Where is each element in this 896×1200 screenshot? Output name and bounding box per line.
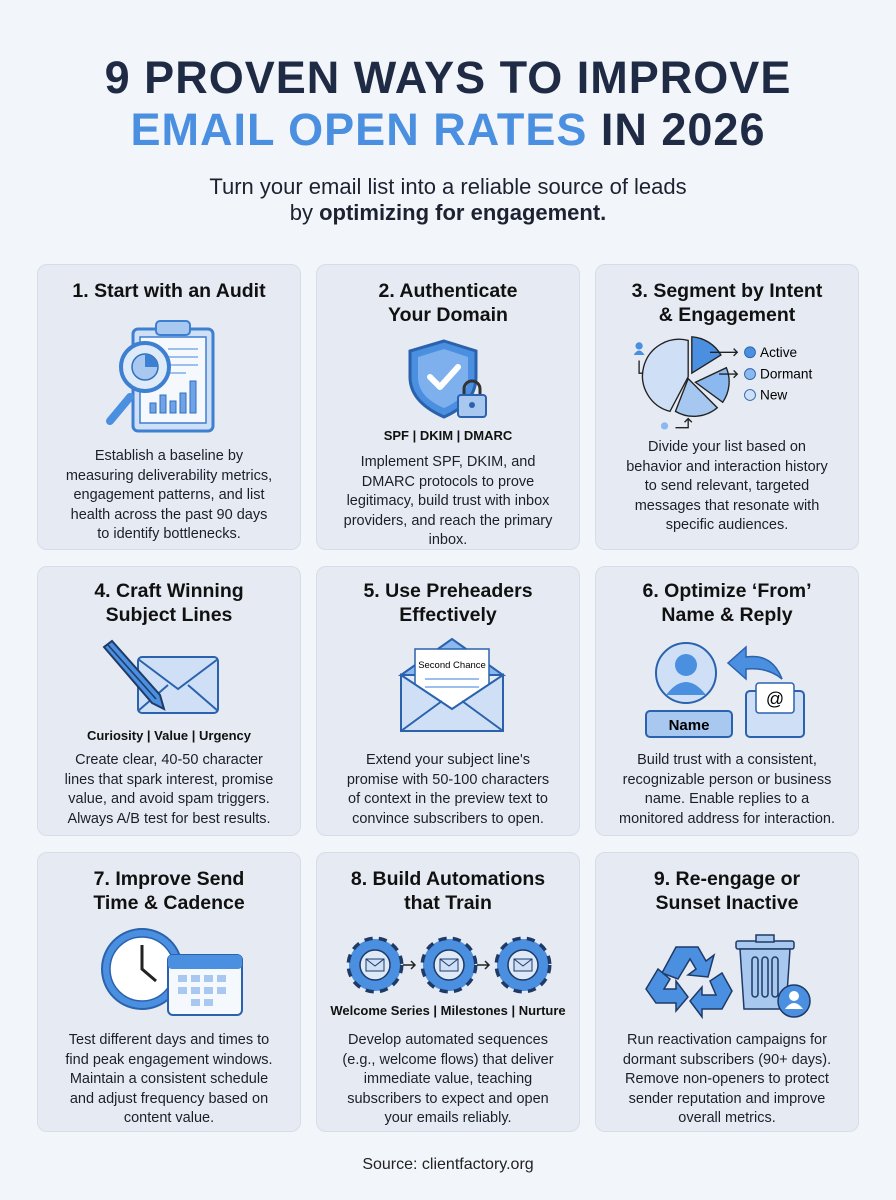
icon: clock calendar: [101, 928, 243, 1016]
text 2: providers, and reach the primary: [344, 512, 552, 528]
text 5: [347, 752, 549, 826]
text 8: (e.g., welcome flows) that deliver: [342, 1052, 554, 1068]
text 6: recognizable person or business: [623, 772, 831, 788]
text 3: [626, 439, 828, 533]
text 5: convince subscribers to open.: [352, 810, 544, 826]
text 5: promise with 50-100 characters: [347, 772, 549, 788]
text 9: overall metrics.: [678, 1110, 776, 1126]
heading 2: [378, 280, 518, 326]
text 5: Extend your subject line's: [366, 752, 530, 768]
text 2: Implement SPF, DKIM, and: [361, 454, 535, 470]
heading 3: [632, 280, 822, 326]
heading 4: [94, 580, 244, 626]
heading 2: 2. Authenticate: [378, 280, 518, 302]
title: 9 PROVEN WAYS TO IMPROVE: [105, 52, 791, 103]
text 3: messages that resonate with: [635, 498, 819, 514]
label: SPF DKIM DMARC: SPF | DKIM | DMARC: [384, 428, 512, 443]
text 1: engagement patterns, and list: [73, 487, 265, 503]
subtitle: [209, 174, 687, 225]
text 4: value, and avoid spam triggers.: [68, 791, 270, 807]
heading 8: 8. Build Automations: [351, 868, 545, 890]
text 5: of context in the preview text to: [348, 791, 548, 807]
heading 6: [642, 580, 812, 626]
heading 6: 6. Optimize ‘From’: [642, 580, 812, 602]
text 4: [65, 752, 273, 826]
panel: 2 authenticate: [316, 264, 580, 550]
text 7: content value.: [124, 1110, 214, 1126]
text 1: to identify bottlenecks.: [97, 526, 241, 542]
icon: envelope pencil: [102, 640, 219, 714]
heading 7: 7. Improve Send: [94, 868, 244, 890]
heading 4: Subject Lines: [106, 604, 232, 626]
text 7: and adjust frequency based on: [70, 1090, 268, 1106]
label: welcome milestones nurture: Welcome Series | Milestones | Nurture: [330, 1003, 566, 1018]
icon: open envelope: Second Chance: [418, 660, 486, 671]
icon: pie chart segments: [634, 336, 812, 430]
heading 5: Effectively: [399, 604, 497, 626]
icon: recycle trash: [645, 934, 811, 1020]
panel: 4 subject lines: [37, 566, 301, 836]
text 3: to send relevant, targeted: [645, 478, 809, 494]
text 7: [65, 1032, 273, 1126]
text 9: Remove non-openers to protect: [625, 1071, 829, 1087]
text 2: [344, 454, 552, 548]
text 4: Create clear, 40-50 character: [75, 752, 263, 768]
text 1: measuring deliverability metrics,: [66, 468, 272, 484]
text 9: sender reputation and improve: [629, 1090, 825, 1106]
panel: 3 segment: [595, 264, 859, 550]
icon: pie chart segments: New: [760, 388, 787, 403]
text 8: immediate value, teaching: [364, 1071, 532, 1087]
text 3: behavior and interaction history: [626, 458, 828, 474]
panel: 9 re-engage: [595, 852, 859, 1132]
heading 3: & Engagement: [659, 304, 795, 326]
icon: profile reply: Name: [669, 717, 709, 734]
text 7: find peak engagement windows.: [65, 1052, 273, 1068]
text 6: monitored address for interaction.: [619, 810, 835, 826]
heading 4: 4. Craft Winning: [94, 580, 244, 602]
text 7: Maintain a consistent schedule: [70, 1071, 268, 1087]
text 8: subscribers to expect and open: [347, 1090, 549, 1106]
panel: 5 preheaders: [316, 566, 580, 836]
panel: 8 automations: [316, 852, 580, 1132]
heading 7: Time & Cadence: [93, 892, 245, 914]
text 1: [66, 448, 272, 542]
source: Source: clientfactory.org: [362, 1156, 534, 1173]
text 2: DMARC protocols to prove: [362, 474, 534, 490]
icon: profile reply: @: [766, 689, 784, 709]
text 6: Build trust with a consistent,: [637, 752, 817, 768]
text 9: [623, 1032, 831, 1126]
panel: 1 audit: [37, 264, 301, 550]
subtitle: Turn your email list into a reliable source of leads: [209, 174, 687, 199]
title: [105, 52, 791, 155]
text 1: health across the past 90 days: [71, 506, 267, 522]
panel: 7 send time: [37, 852, 301, 1132]
text 4: Always A/B test for best results.: [67, 810, 271, 826]
text 9: dormant subscribers (90+ days).: [623, 1052, 831, 1068]
heading 3: 3. Segment by Intent: [632, 280, 822, 302]
text 9: Run reactivation campaigns for: [627, 1032, 827, 1048]
heading 8: that Train: [404, 892, 492, 914]
icon: pie chart segments: Active: [760, 345, 797, 360]
text 7: Test different days and times to: [69, 1032, 269, 1048]
subtitle: by optimizing for engagement.: [290, 200, 606, 225]
text 2: legitimacy, build trust with inbox: [347, 493, 549, 509]
text 8: Develop automated sequences: [348, 1032, 548, 1048]
text 6: name. Enable replies to a: [645, 791, 809, 807]
icon: open envelope: [398, 638, 506, 732]
heading 5: [363, 580, 533, 626]
icon: pie chart segments: Dormant: [760, 367, 812, 382]
text 3: specific audiences.: [666, 517, 788, 533]
heading 9: 9. Re-engage or: [654, 868, 800, 890]
panel: 6 from name: [595, 566, 859, 836]
heading 9: [654, 868, 800, 914]
text 2: inbox.: [429, 532, 467, 548]
heading 5: 5. Use Preheaders: [363, 580, 533, 602]
icon: gears with envelopes: [346, 936, 552, 994]
icon: profile reply: [645, 642, 805, 738]
text 3: Divide your list based on: [648, 439, 806, 455]
text 8: [342, 1032, 554, 1126]
text 1: Establish a baseline by: [95, 448, 243, 464]
heading 9: Sunset Inactive: [655, 892, 799, 914]
icon: shield lock: [408, 339, 487, 419]
icon: clipboard magnifier: [106, 320, 214, 432]
title: EMAIL OPEN RATES IN 2026: [130, 104, 766, 155]
heading 1: 1. Start with an Audit: [72, 280, 266, 302]
heading 8: [351, 868, 545, 914]
label: curiosity value urgency: Curiosity | Value | Urgency: [87, 728, 251, 743]
text 8: your emails reliably.: [384, 1110, 512, 1126]
heading 2: Your Domain: [388, 304, 508, 326]
heading 6: Name & Reply: [661, 604, 793, 626]
heading 7: [93, 868, 245, 914]
text 4: lines that spark interest, promise: [65, 772, 273, 788]
text 6: [619, 752, 835, 826]
